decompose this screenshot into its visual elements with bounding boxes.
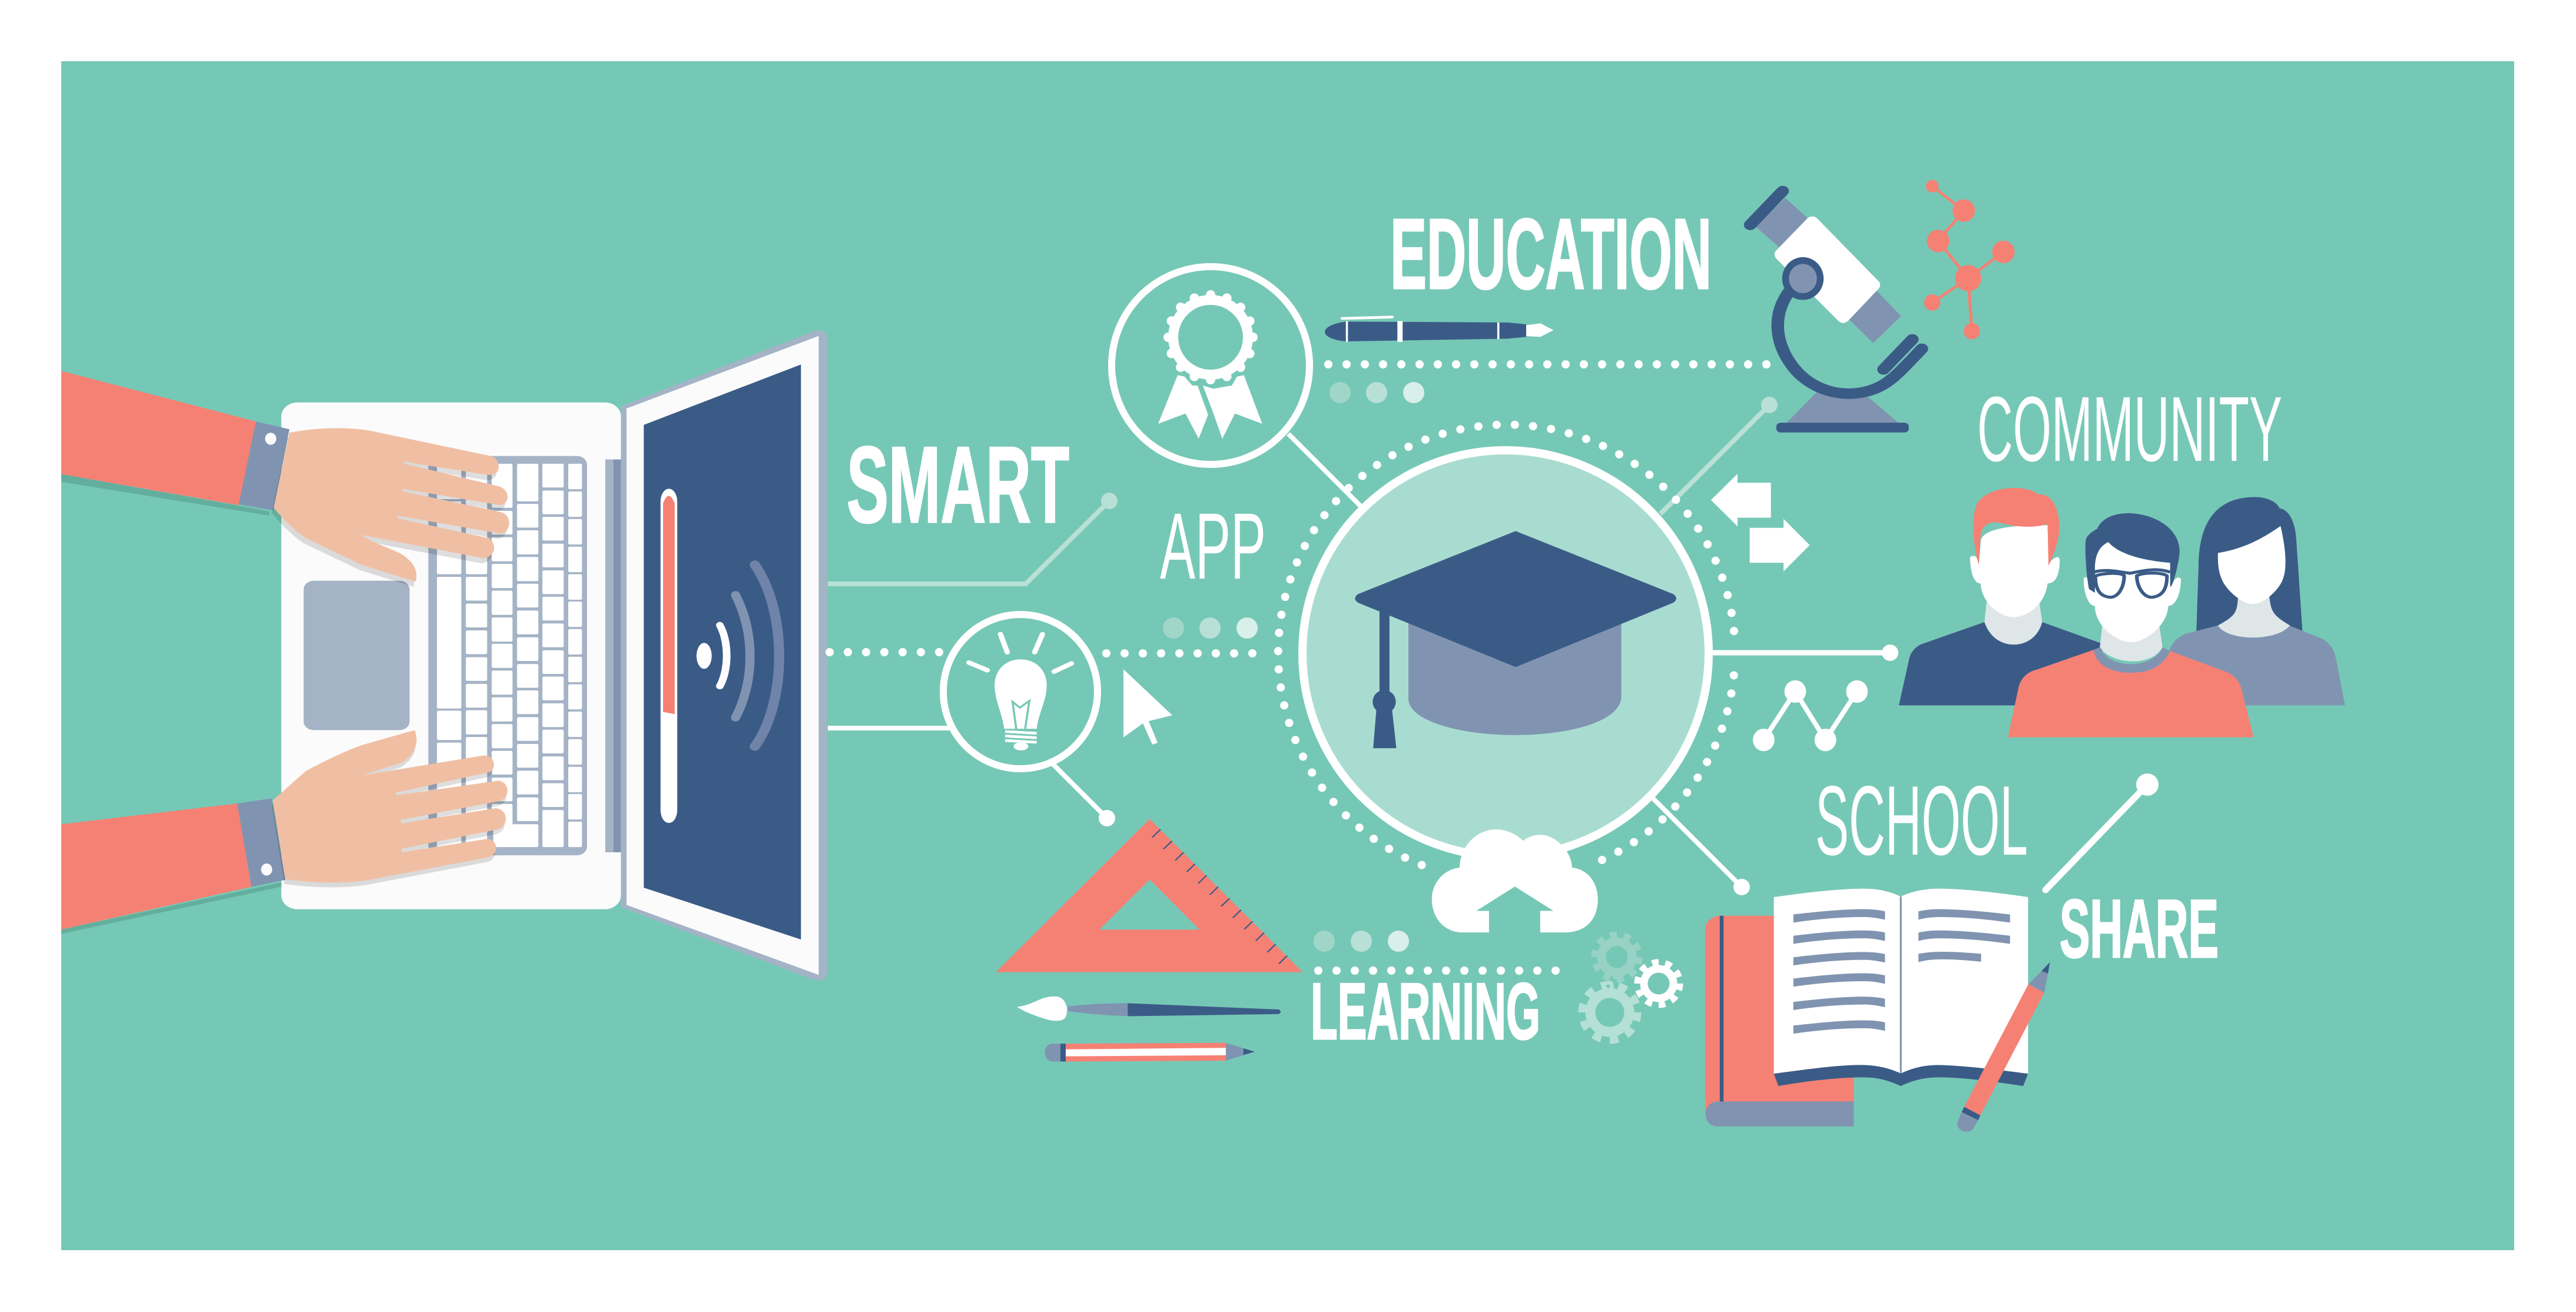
- smart connector line: [828, 493, 1118, 584]
- icon: microscope: [1750, 191, 1922, 433]
- fading dot rows: [1163, 382, 1424, 952]
- bottom arm: [61, 798, 286, 934]
- icon: light bulb in circle: [943, 615, 1098, 769]
- heading: COMMUNITY: COMMUNITY: [1977, 378, 2282, 481]
- central circle: [1302, 450, 1709, 856]
- top hand: [271, 428, 509, 587]
- gear white: [1637, 962, 1680, 1005]
- heading: SCHOOL: SCHOOL: [1815, 765, 2028, 876]
- icon: community people: [1899, 488, 2345, 738]
- school connector with dot: [1652, 798, 1750, 895]
- learning dotted line: [1318, 966, 1572, 975]
- top arm: [61, 371, 290, 516]
- bottom hand: [271, 730, 508, 887]
- icon: fountain pen: [1325, 317, 1553, 342]
- connector lines and dotted paths: [828, 364, 2159, 971]
- icon: cloud upload: [1432, 829, 1598, 932]
- icon: badge in circle: [1112, 267, 1309, 464]
- heading: APP: APP: [1160, 493, 1266, 599]
- dotted ring arc right: [1602, 674, 1734, 860]
- icon: exchange arrows: [1711, 474, 1809, 572]
- dotted ring arc left: [1278, 424, 1734, 866]
- heading: SMART: SMART: [847, 424, 1069, 545]
- gear light: [1582, 985, 1637, 1040]
- wifi signal icon: [697, 565, 779, 746]
- icon: pencil: [1045, 1043, 1255, 1061]
- dotted line bulb to ring: [1106, 649, 1254, 657]
- icon: set square ruler: [996, 819, 1302, 972]
- keyboard: [428, 456, 587, 855]
- education dotted line: [1328, 360, 1768, 368]
- heading: EDUCATION: EDUCATION: [1390, 198, 1712, 310]
- icon: zigzag network: [1753, 680, 1868, 751]
- badge connector: [1288, 434, 1361, 506]
- education dots: [1330, 382, 1424, 403]
- trackpad: [304, 581, 410, 730]
- icon: cursor: [1123, 669, 1172, 745]
- icon: paint brush: [1017, 997, 1281, 1021]
- woman figure: [2129, 497, 2345, 705]
- gear pale: [1594, 935, 1639, 979]
- icon: gears: [1582, 935, 1680, 1040]
- laptop base: [281, 403, 621, 909]
- middle man figure: [2008, 513, 2253, 738]
- page text lines: [1793, 909, 2010, 1034]
- icon: open book with pencil: [1705, 889, 2050, 1132]
- open book pages: [1774, 889, 2028, 1086]
- heading: LEARNING: LEARNING: [1311, 966, 1540, 1056]
- laptop lid and screen: [621, 330, 827, 981]
- icon: molecule: [1924, 180, 2015, 340]
- closed book behind: [1705, 916, 1854, 1127]
- line to bulb: [828, 726, 949, 730]
- laptop with typing hands: [61, 330, 827, 981]
- microscope connector with dot: [1660, 397, 1778, 514]
- hinge bar: [605, 460, 621, 852]
- bulb connector with dot: [1053, 764, 1115, 826]
- learning dots: [1314, 931, 1409, 952]
- share connector with dot: [2045, 773, 2159, 890]
- left man figure: [1899, 488, 2101, 705]
- progress bar: [661, 489, 677, 823]
- pencil on book: [1957, 962, 2050, 1132]
- graduation cap: [1355, 531, 1676, 748]
- app dots: [1163, 617, 1258, 639]
- heading: SHARE: SHARE: [2060, 882, 2219, 975]
- community connector with dot: [1710, 645, 1898, 661]
- dotted line to bulb: [830, 648, 944, 656]
